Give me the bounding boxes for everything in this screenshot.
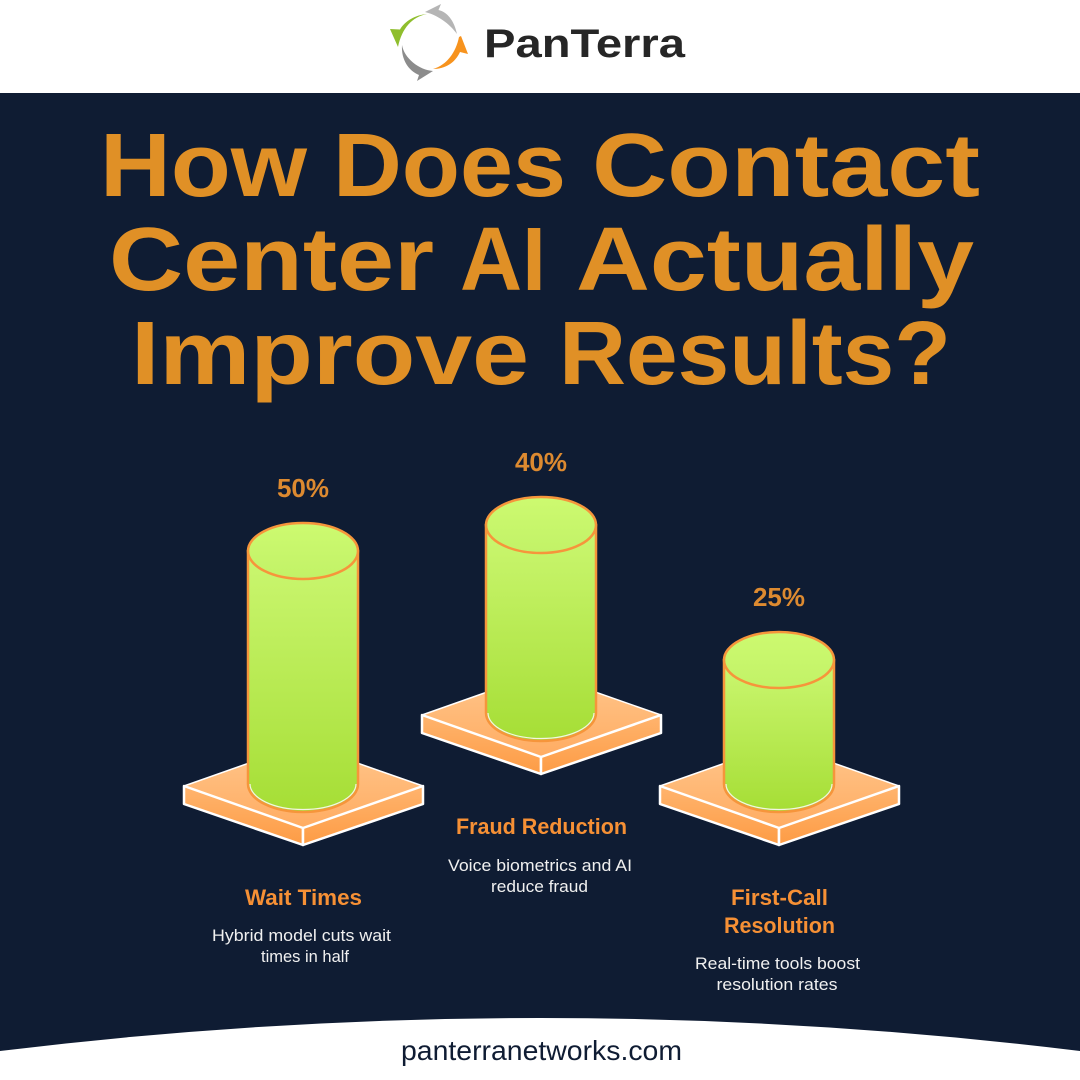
- icon: green arrow: [390, 14, 427, 47]
- header band: [0, 0, 1080, 93]
- description: resolution rates: [716, 976, 838, 994]
- heading: [724, 885, 835, 938]
- heading: First-Call: [731, 885, 828, 910]
- logo: PanTerra: [390, 4, 686, 81]
- title: Contact: [592, 116, 980, 216]
- footer white curve: [0, 1018, 1080, 1080]
- isometric base: [184, 744, 423, 845]
- heading: Wait Times: [245, 885, 362, 910]
- logo wordmark: PanTerra: [484, 22, 686, 66]
- description: [448, 857, 632, 896]
- title: Does: [333, 116, 566, 216]
- description: [695, 955, 860, 994]
- cylinder: [486, 497, 596, 741]
- column: Fraud Reduction 40%: [422, 447, 661, 896]
- heading: Fraud Reduction: [456, 814, 627, 839]
- footer URL: panterranetworks.com: [401, 1035, 682, 1066]
- isometric base: [422, 673, 661, 774]
- column: Wait Times 50%: [184, 473, 423, 966]
- heading: Resolution: [724, 913, 835, 938]
- title: [100, 116, 980, 404]
- description: Hybrid model cuts wait: [212, 927, 391, 945]
- description: Voice biometrics and AI: [448, 857, 632, 875]
- title: How: [100, 116, 308, 216]
- value label: 50%: [277, 473, 329, 503]
- cylinder: [724, 632, 834, 812]
- description: Real-time tools boost: [695, 955, 860, 973]
- description: reduce fraud: [491, 878, 588, 896]
- icon: light grey arrow: [425, 4, 457, 34]
- value label: 40%: [515, 447, 567, 477]
- title: AI: [460, 210, 546, 310]
- title: Improve: [131, 304, 529, 404]
- title: Center: [109, 210, 434, 310]
- isometric base: [660, 744, 899, 845]
- description: [212, 927, 391, 966]
- description: times in half: [261, 948, 349, 966]
- column: First-Call Resolution 25%: [660, 582, 899, 994]
- icon: orange arrow: [433, 36, 468, 69]
- value label: 25%: [753, 582, 805, 612]
- cylinder: [248, 523, 358, 812]
- icon: dark grey arrow: [402, 45, 433, 81]
- title: Results?: [559, 304, 951, 404]
- title: Actually: [576, 210, 974, 310]
